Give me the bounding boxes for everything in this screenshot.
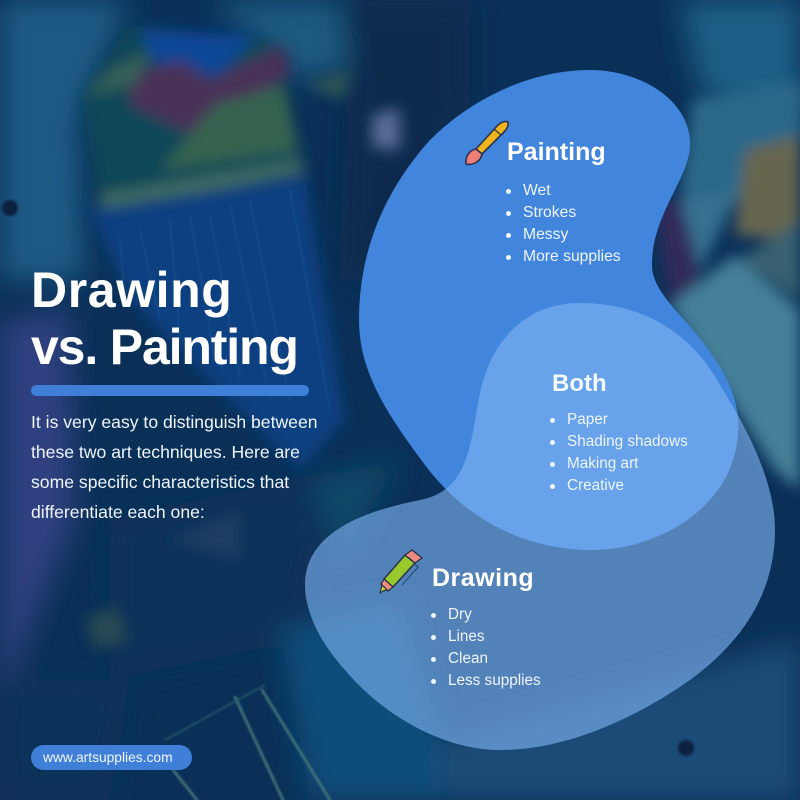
list: both <box>550 411 688 494</box>
intro paragraph: It is very easy to distinguish between <box>31 412 318 432</box>
list: both: Making art <box>567 455 638 472</box>
list: both: Paper <box>567 411 608 428</box>
list: drawing <box>431 606 541 689</box>
title: Drawing <box>31 262 232 318</box>
title: vs. Painting <box>31 319 298 375</box>
list: drawing: Dry <box>448 606 472 623</box>
heading: Painting: Painting <box>507 138 606 166</box>
heading: Drawing: Drawing <box>432 564 534 592</box>
list: both: Shading shadows <box>567 433 688 450</box>
website pill: www.artsupplies.com <box>43 750 173 765</box>
list: painting: Messy <box>523 226 568 243</box>
intro paragraph <box>31 412 318 522</box>
list: painting: Strokes <box>523 204 576 221</box>
icon: marker pen <box>379 549 423 594</box>
website pill <box>31 745 192 770</box>
list: drawing: Less supplies <box>448 672 541 689</box>
list: both: Creative <box>567 477 624 494</box>
list: drawing: Clean <box>448 650 488 667</box>
title underline bar <box>31 385 309 396</box>
icon: paint brush <box>465 120 509 166</box>
intro paragraph: some specific characteristics that <box>31 472 289 492</box>
heading: Both: Both <box>552 370 607 397</box>
list: painting: Wet <box>523 182 551 199</box>
intro paragraph: these two art techniques. Here are <box>31 442 300 462</box>
intro paragraph: differentiate each one: <box>31 502 205 522</box>
list: painting: More supplies <box>523 248 621 265</box>
title <box>31 262 298 375</box>
list: painting <box>506 182 621 265</box>
list: drawing: Lines <box>448 628 485 645</box>
